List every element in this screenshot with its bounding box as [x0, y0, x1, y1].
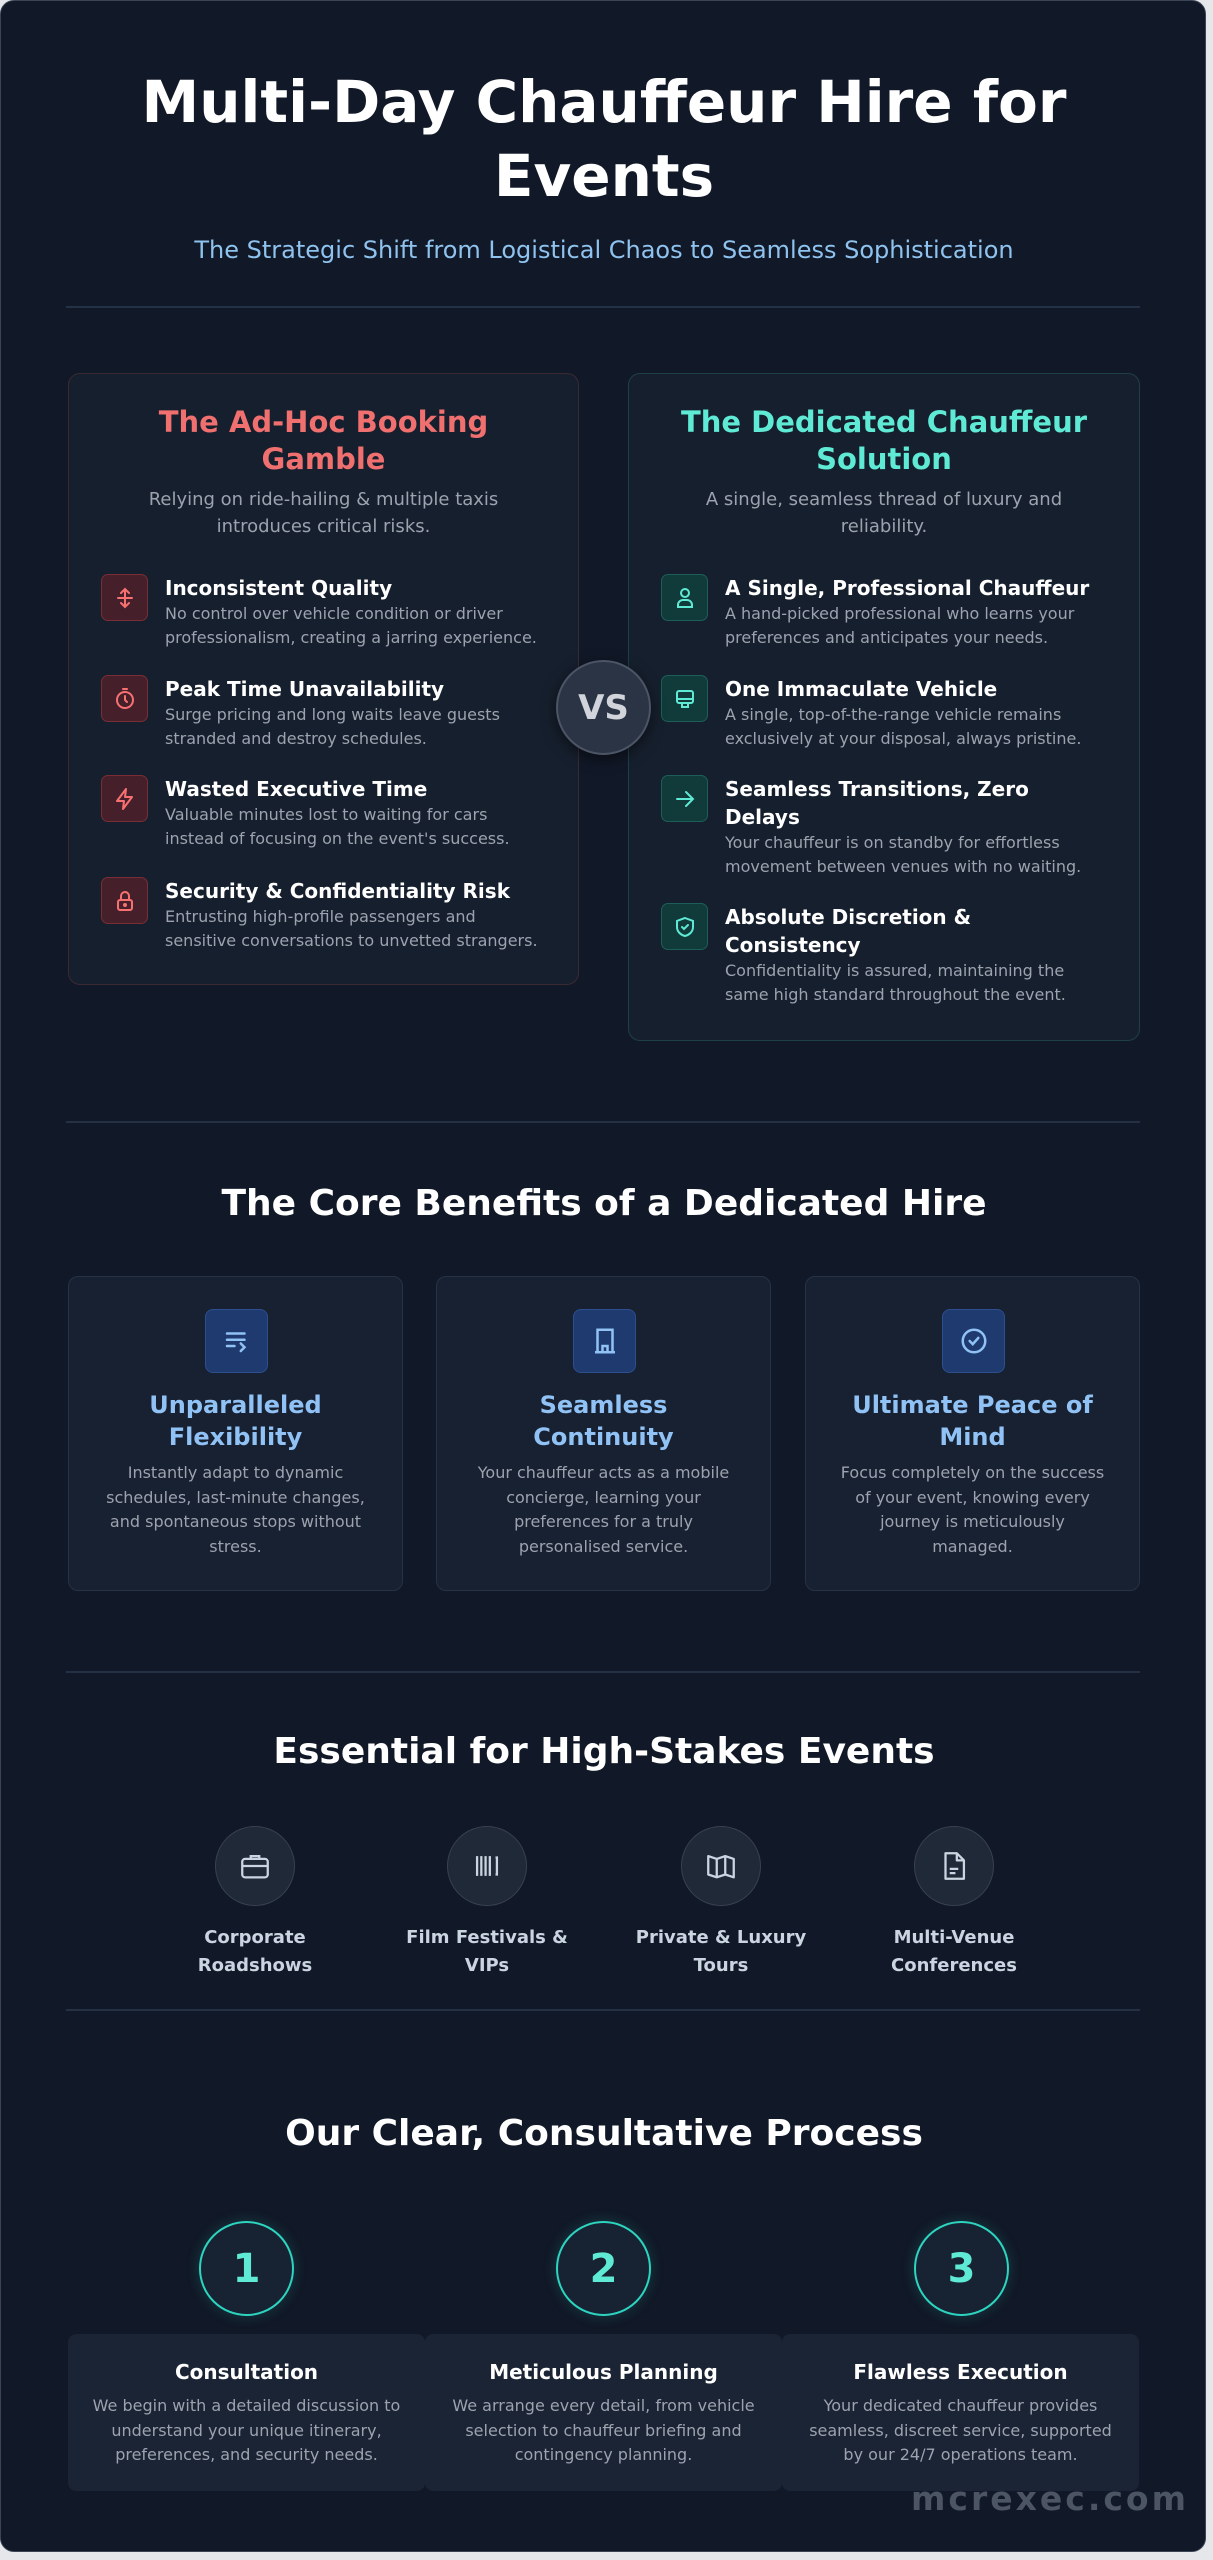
icon: vehicle	[661, 675, 708, 722]
step number 2	[556, 2221, 651, 2316]
icon: building	[573, 1309, 636, 1373]
panel subtitle: A single, seamless thread of luxury and reliability.	[706, 489, 1062, 537]
item: professional chauffeur: A hand-picked professional who learns your preferences and anticipates your needs.	[725, 604, 1074, 647]
item: vehicle	[661, 675, 1081, 748]
item: discretion	[661, 903, 1066, 1004]
event: roadshows: Roadshows	[198, 1955, 312, 1976]
item: inconsistent quality	[101, 574, 537, 647]
icon: arrow	[661, 775, 708, 822]
item: discretion: Confidentiality is assured, maintaining the same high standard throughout the event.	[725, 961, 1066, 1004]
icon: film	[447, 1826, 527, 1906]
event: film festivals: Film Festivals &	[406, 1927, 568, 1948]
icon: arrows	[101, 574, 148, 621]
item: vehicle: A single, top-of-the-range vehicle remains exclusively at your disposal, always pristine.	[725, 705, 1081, 748]
step number 3: 3	[948, 2246, 975, 2292]
step: execution: Your dedicated chauffeur provides seamless, discreet service, supported by our 24/7 operations team.	[809, 2396, 1112, 2464]
step: consultation: We begin with a detailed discussion to understand your unique itinerary, preferences, and security needs.	[93, 2396, 400, 2464]
card: peace of mind	[805, 1276, 1140, 1591]
icon: list	[205, 1309, 268, 1373]
step number 1: 1	[233, 2246, 260, 2292]
item: discretion: Absolute Discretion & Consistency	[725, 905, 971, 957]
item: professional chauffeur	[661, 574, 1090, 647]
step number 3	[914, 2221, 1009, 2316]
heading: process: Our Clear, Consultative Process	[285, 2113, 923, 2154]
step: execution: Flawless Execution	[853, 2360, 1068, 2384]
card: continuity: Seamless Continuity	[533, 1391, 674, 1451]
step number 1	[199, 2221, 294, 2316]
item: peak time	[101, 675, 500, 748]
step: consultation: Consultation	[175, 2360, 318, 2384]
icon: person	[661, 574, 708, 621]
item: transitions	[661, 775, 1081, 876]
item: wasted time	[101, 775, 510, 848]
title: Multi-Day Chauffeur Hire for Events	[142, 68, 1066, 210]
step: planning: We arrange every detail, from vehicle selection to chauffeur briefing and contingency planning.	[452, 2396, 755, 2464]
icon: document	[914, 1826, 994, 1906]
card: peace of mind: Focus completely on the success of your event, knowing every journey is meticulously managed.	[841, 1463, 1104, 1556]
step number 2: 2	[590, 2246, 617, 2292]
event: conferences: Conferences	[891, 1955, 1017, 1976]
card: continuity: Your chauffeur acts as a mobile concierge, learning your preferences for a truly personalised service.	[478, 1463, 729, 1556]
icon: check circle	[942, 1309, 1005, 1373]
event: tours: Private & Luxury	[636, 1927, 806, 1948]
item: wasted time: Valuable minutes lost to waiting for cars instead of focusing on the event's success.	[165, 805, 510, 848]
event: film festivals: VIPs	[465, 1955, 509, 1976]
item: professional chauffeur: A Single, Professional Chauffeur	[725, 576, 1089, 600]
watermark: mcrexec.com	[911, 2479, 1189, 2518]
icon: lock	[101, 877, 148, 924]
VS badge: VS	[578, 688, 629, 728]
card: peace of mind: Ultimate Peace of Mind	[852, 1391, 1093, 1451]
item: peak time: Peak Time Unavailability	[165, 677, 444, 701]
step: planning: Meticulous Planning	[489, 2360, 718, 2384]
step: planning	[425, 2334, 782, 2491]
card: flexibility: Unparalleled Flexibility	[149, 1391, 322, 1451]
panel: ad-hoc booking	[68, 373, 579, 985]
icon: map	[681, 1826, 761, 1906]
event: roadshows: Corporate	[204, 1927, 306, 1948]
card: continuity	[436, 1276, 771, 1591]
subtitle: The Strategic Shift from Logistical Chaos to Seamless Sophistication	[194, 236, 1014, 264]
event: conferences	[891, 1826, 1017, 1976]
panel: dedicated solution	[628, 373, 1140, 1041]
heading: core benefits: The Core Benefits of a Dedicated Hire	[221, 1183, 987, 1224]
item: inconsistent quality: No control over vehicle condition or driver professionalism, creating a jarring experience.	[165, 604, 537, 647]
card: flexibility: Instantly adapt to dynamic schedules, last-minute changes, and spontaneous stops without stress.	[106, 1463, 365, 1556]
item: security: Entrusting high-profile passengers and sensitive conversations to unvetted strangers.	[165, 907, 538, 950]
event: tours	[636, 1826, 806, 1976]
event: conferences: Multi-Venue	[894, 1927, 1014, 1948]
panel subtitle: Relying on ride-hailing & multiple taxis introduces critical risks.	[149, 489, 498, 537]
icon: timer	[101, 675, 148, 722]
step: execution	[782, 2334, 1139, 2491]
step: consultation	[68, 2334, 425, 2491]
heading: essential events: Essential for High-Stakes Events	[273, 1731, 935, 1772]
event: film festivals	[406, 1826, 568, 1976]
card: flexibility	[68, 1276, 403, 1591]
panel title: The Dedicated Chauffeur Solution	[681, 405, 1087, 476]
icon: briefcase	[215, 1826, 295, 1906]
item: inconsistent quality: Inconsistent Quality	[165, 576, 392, 600]
item: wasted time: Wasted Executive Time	[165, 777, 427, 801]
event: tours: Tours	[694, 1955, 748, 1976]
item: vehicle: One Immaculate Vehicle	[725, 677, 997, 701]
item: transitions: Your chauffeur is on standby for effortless movement between venues with no waiting.	[725, 833, 1081, 876]
item: peak time: Surge pricing and long waits leave guests stranded and destroy schedules.	[165, 705, 500, 748]
item: security: Security & Confidentiality Risk	[165, 879, 510, 903]
panel title: The Ad-Hoc Booking Gamble	[159, 405, 488, 476]
icon: bolt	[101, 775, 148, 822]
event: roadshows	[198, 1826, 312, 1976]
item: security	[101, 877, 538, 950]
item: transitions: Seamless Transitions, Zero Delays	[725, 777, 1029, 829]
icon: shield	[661, 903, 708, 950]
VS badge	[556, 660, 651, 755]
